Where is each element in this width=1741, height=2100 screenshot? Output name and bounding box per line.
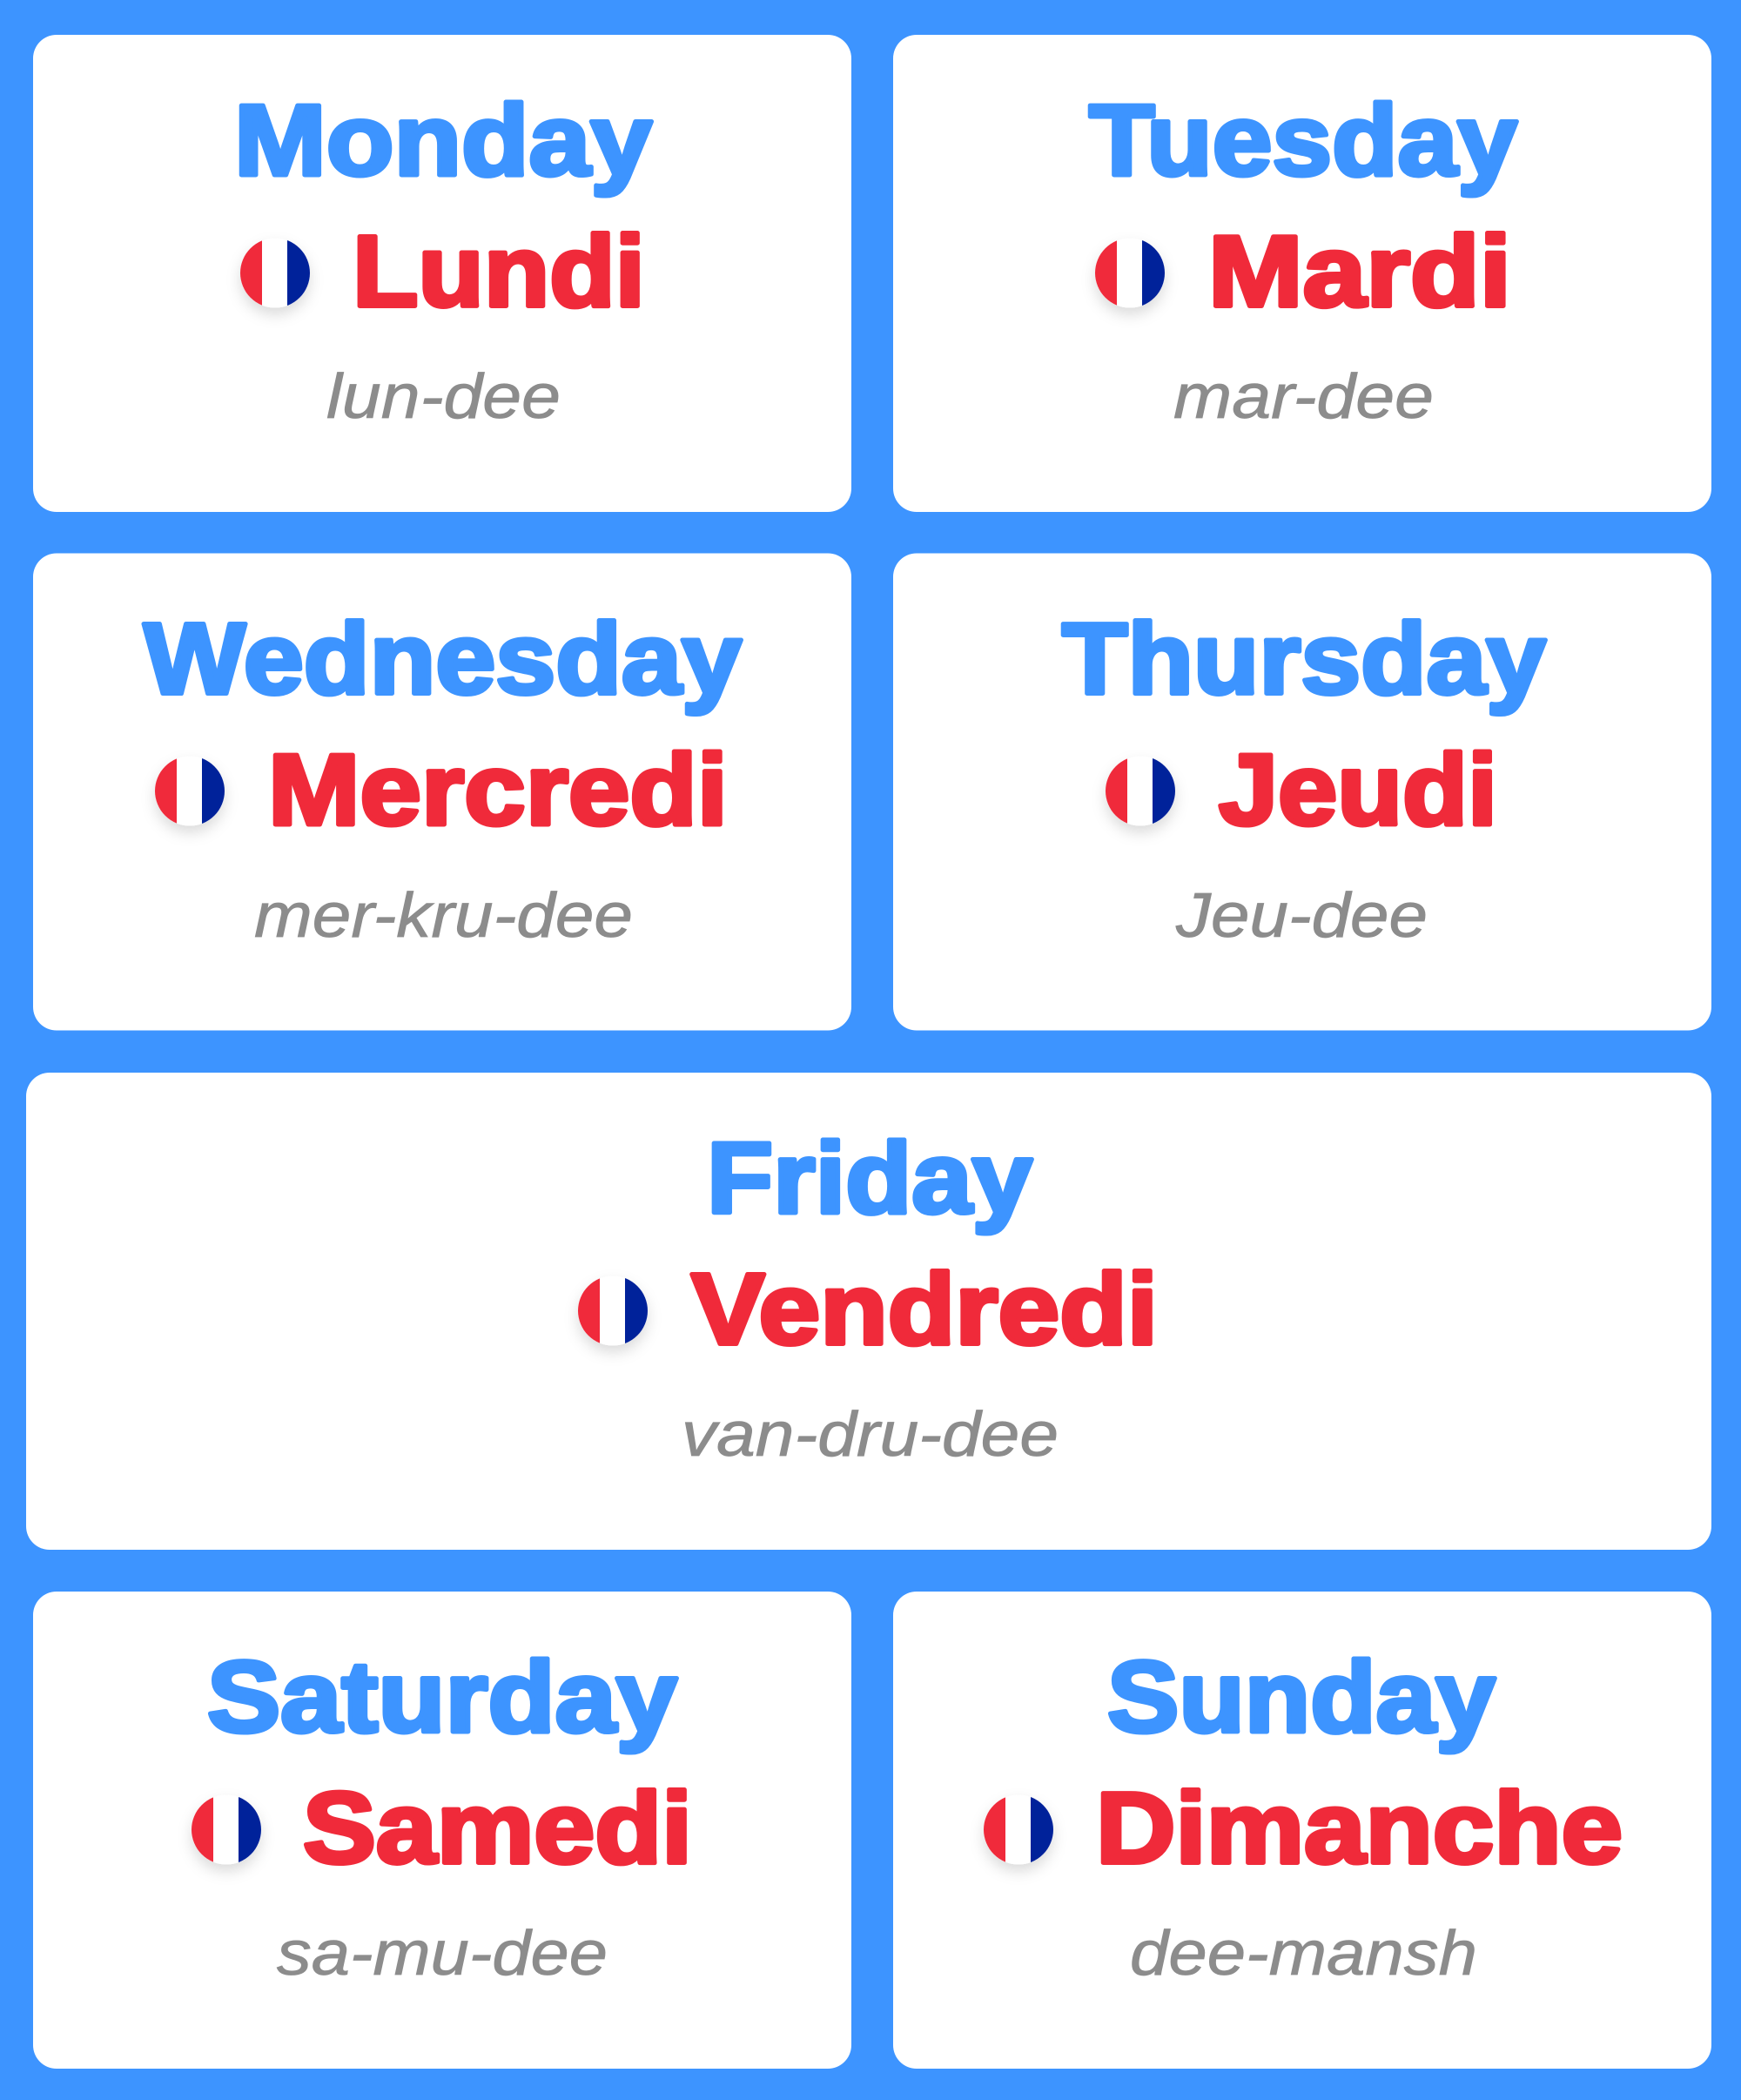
icon: French flag [192, 1795, 261, 1865]
heading: Tuesday: Tuesday [1089, 84, 1517, 197]
heading: Thursday: Thursday [1062, 602, 1546, 716]
French word: Jeudi: Jeudi [1219, 733, 1497, 846]
pronunciation: sa-mu-dee: sa-mu-dee [277, 1919, 608, 1989]
French word: Mercredi: Mercredi [268, 733, 728, 846]
icon: French flag [1106, 756, 1175, 825]
panel: Monday [33, 35, 851, 512]
French word: Mardi: Mardi [1208, 214, 1511, 327]
French word: Dimanche: Dimanche [1096, 1771, 1623, 1884]
icon: French flag [1095, 239, 1165, 308]
panel: Wednesday [33, 554, 851, 1031]
icon: French flag [578, 1276, 648, 1346]
heading: Saturday: Saturday [207, 1640, 677, 1753]
icon: French flag [240, 239, 310, 308]
heading: Sunday: Sunday [1107, 1640, 1496, 1753]
pronunciation: lun-dee: lun-dee [326, 362, 561, 432]
pronunciation: Jeu-dee: Jeu-dee [1175, 881, 1428, 951]
panel: Tuesday [893, 35, 1711, 512]
panel: Thursday [893, 554, 1711, 1031]
French word: Samedi: Samedi [303, 1771, 692, 1884]
panel: Saturday [33, 1592, 851, 2069]
icon: French flag [155, 756, 225, 825]
heading: Wednesday: Wednesday [144, 602, 742, 716]
icon: French flag [984, 1795, 1053, 1865]
pronunciation: mar-dee: mar-dee [1173, 362, 1434, 432]
heading: Monday: Monday [234, 84, 652, 197]
French word: Lundi: Lundi [353, 214, 645, 327]
heading: Friday: Friday [707, 1121, 1032, 1235]
panel: Sunday [893, 1592, 1711, 2069]
pronunciation: mer-kru-dee: mer-kru-dee [254, 881, 633, 951]
pronunciation: dee-mansh: dee-mansh [1130, 1919, 1477, 1989]
French word: Vendredi: Vendredi [691, 1252, 1158, 1365]
pronunciation: van-dru-dee: van-dru-dee [682, 1400, 1059, 1470]
panel: Friday [26, 1073, 1711, 1550]
